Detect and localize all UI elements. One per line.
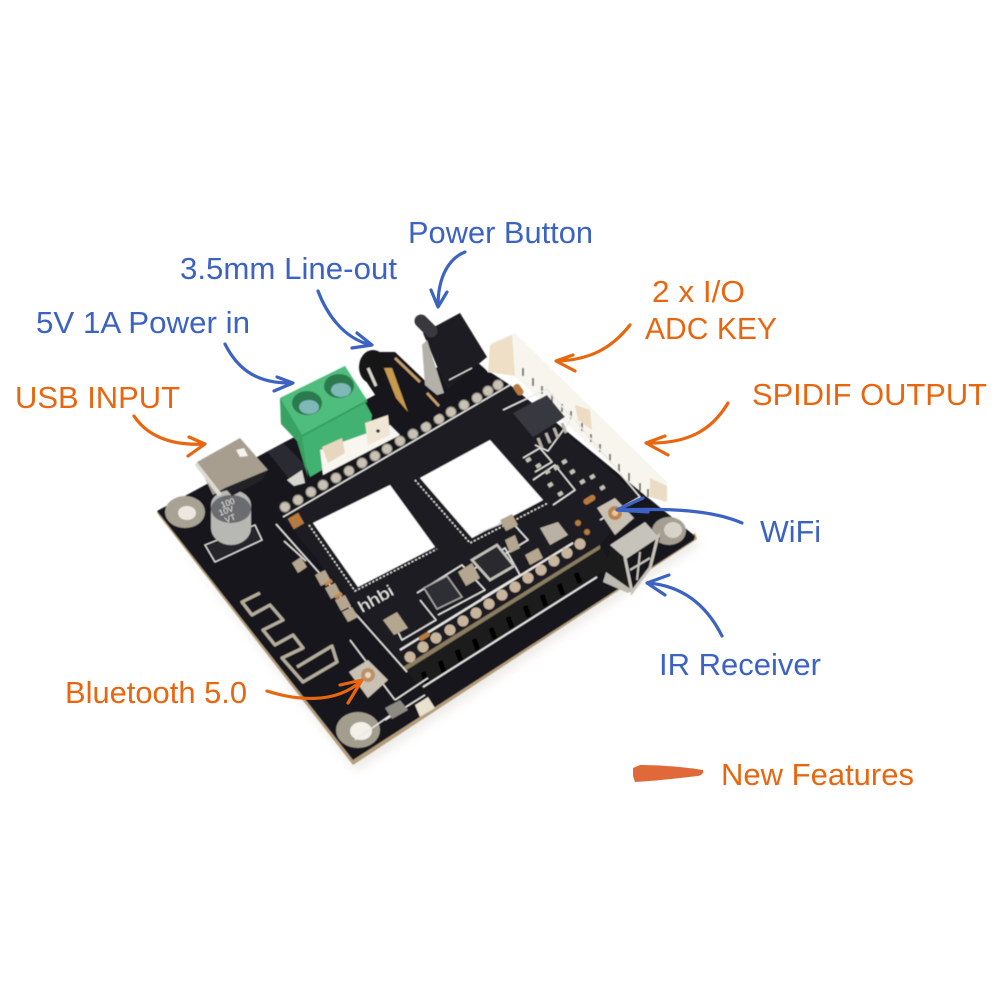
label: New Features: New Features [721,757,914,792]
white board connector [488,333,667,502]
3.5mm audio jack [359,350,445,428]
Bluetooth antenna trace [242,593,337,682]
silk cluster near SOIC chip [525,457,606,497]
capacitor: 10V [217,503,235,518]
arrow: Bluetooth [267,680,362,703]
arrow: power button [431,252,465,307]
arrow: power in [225,344,293,391]
label: 2 x I/O: 2 x I/O [652,274,745,309]
label: SPIDIF OUTPUT: SPIDIF OUTPUT [752,377,987,412]
shielding window right [420,440,543,538]
capacitor: 100 [219,496,236,510]
regulator chip [424,576,462,609]
mounting hole bottom [336,712,380,748]
small white connector [320,415,400,475]
capacitor: VT [223,512,237,525]
SOIC chip [513,395,566,448]
socket band under module [403,545,612,690]
small SMD parts [292,514,543,635]
label: IR Receiver: IR Receiver [659,647,821,682]
micro USB connector [195,438,268,496]
PCB base [157,372,695,760]
PCB edge [157,510,697,765]
orange bands on resistors [324,579,343,599]
label: ADC KEY: ADC KEY [645,311,777,346]
label: WiFi: WiFi [760,514,821,549]
arrow: line-out [318,291,372,348]
label: Bluetooth 5.0: Bluetooth 5.0 [65,675,247,710]
arrow: WiFi [617,498,742,523]
mounting hole top left [165,496,205,528]
capacitor [205,490,262,562]
arrow: IR receiver [647,575,722,636]
label: 5V 1A Power in: 5V 1A Power in [36,305,250,340]
board shadow [165,525,700,772]
legend swatch: brush stroke [633,765,703,782]
circuit board photo [157,313,700,772]
label: USB INPUT: USB INPUT [15,380,180,415]
shielding window left [313,485,435,587]
header pins top row [280,380,503,512]
green terminal block [280,366,372,477]
daughter module [276,385,640,690]
silk screen traces [284,389,640,740]
diode [268,443,307,486]
IR receiver [603,522,660,593]
WiFi antenna connector [597,498,634,535]
orange test pads [288,383,597,642]
label: Power Button: Power Button [408,215,593,250]
module logo: hhbi [356,583,397,616]
arrow: I/O ADC [556,325,630,371]
LEDs [385,700,408,719]
arrow: SPDIF [646,403,728,455]
mounting hole right [652,517,686,545]
Bluetooth antenna connector [349,660,388,698]
inductor [472,545,514,580]
crystal [540,522,568,545]
power button [421,313,488,400]
label: 3.5mm Line-out: 3.5mm Line-out [180,251,397,286]
header pins bottom row [404,538,586,662]
arrow: USB input [134,416,205,456]
